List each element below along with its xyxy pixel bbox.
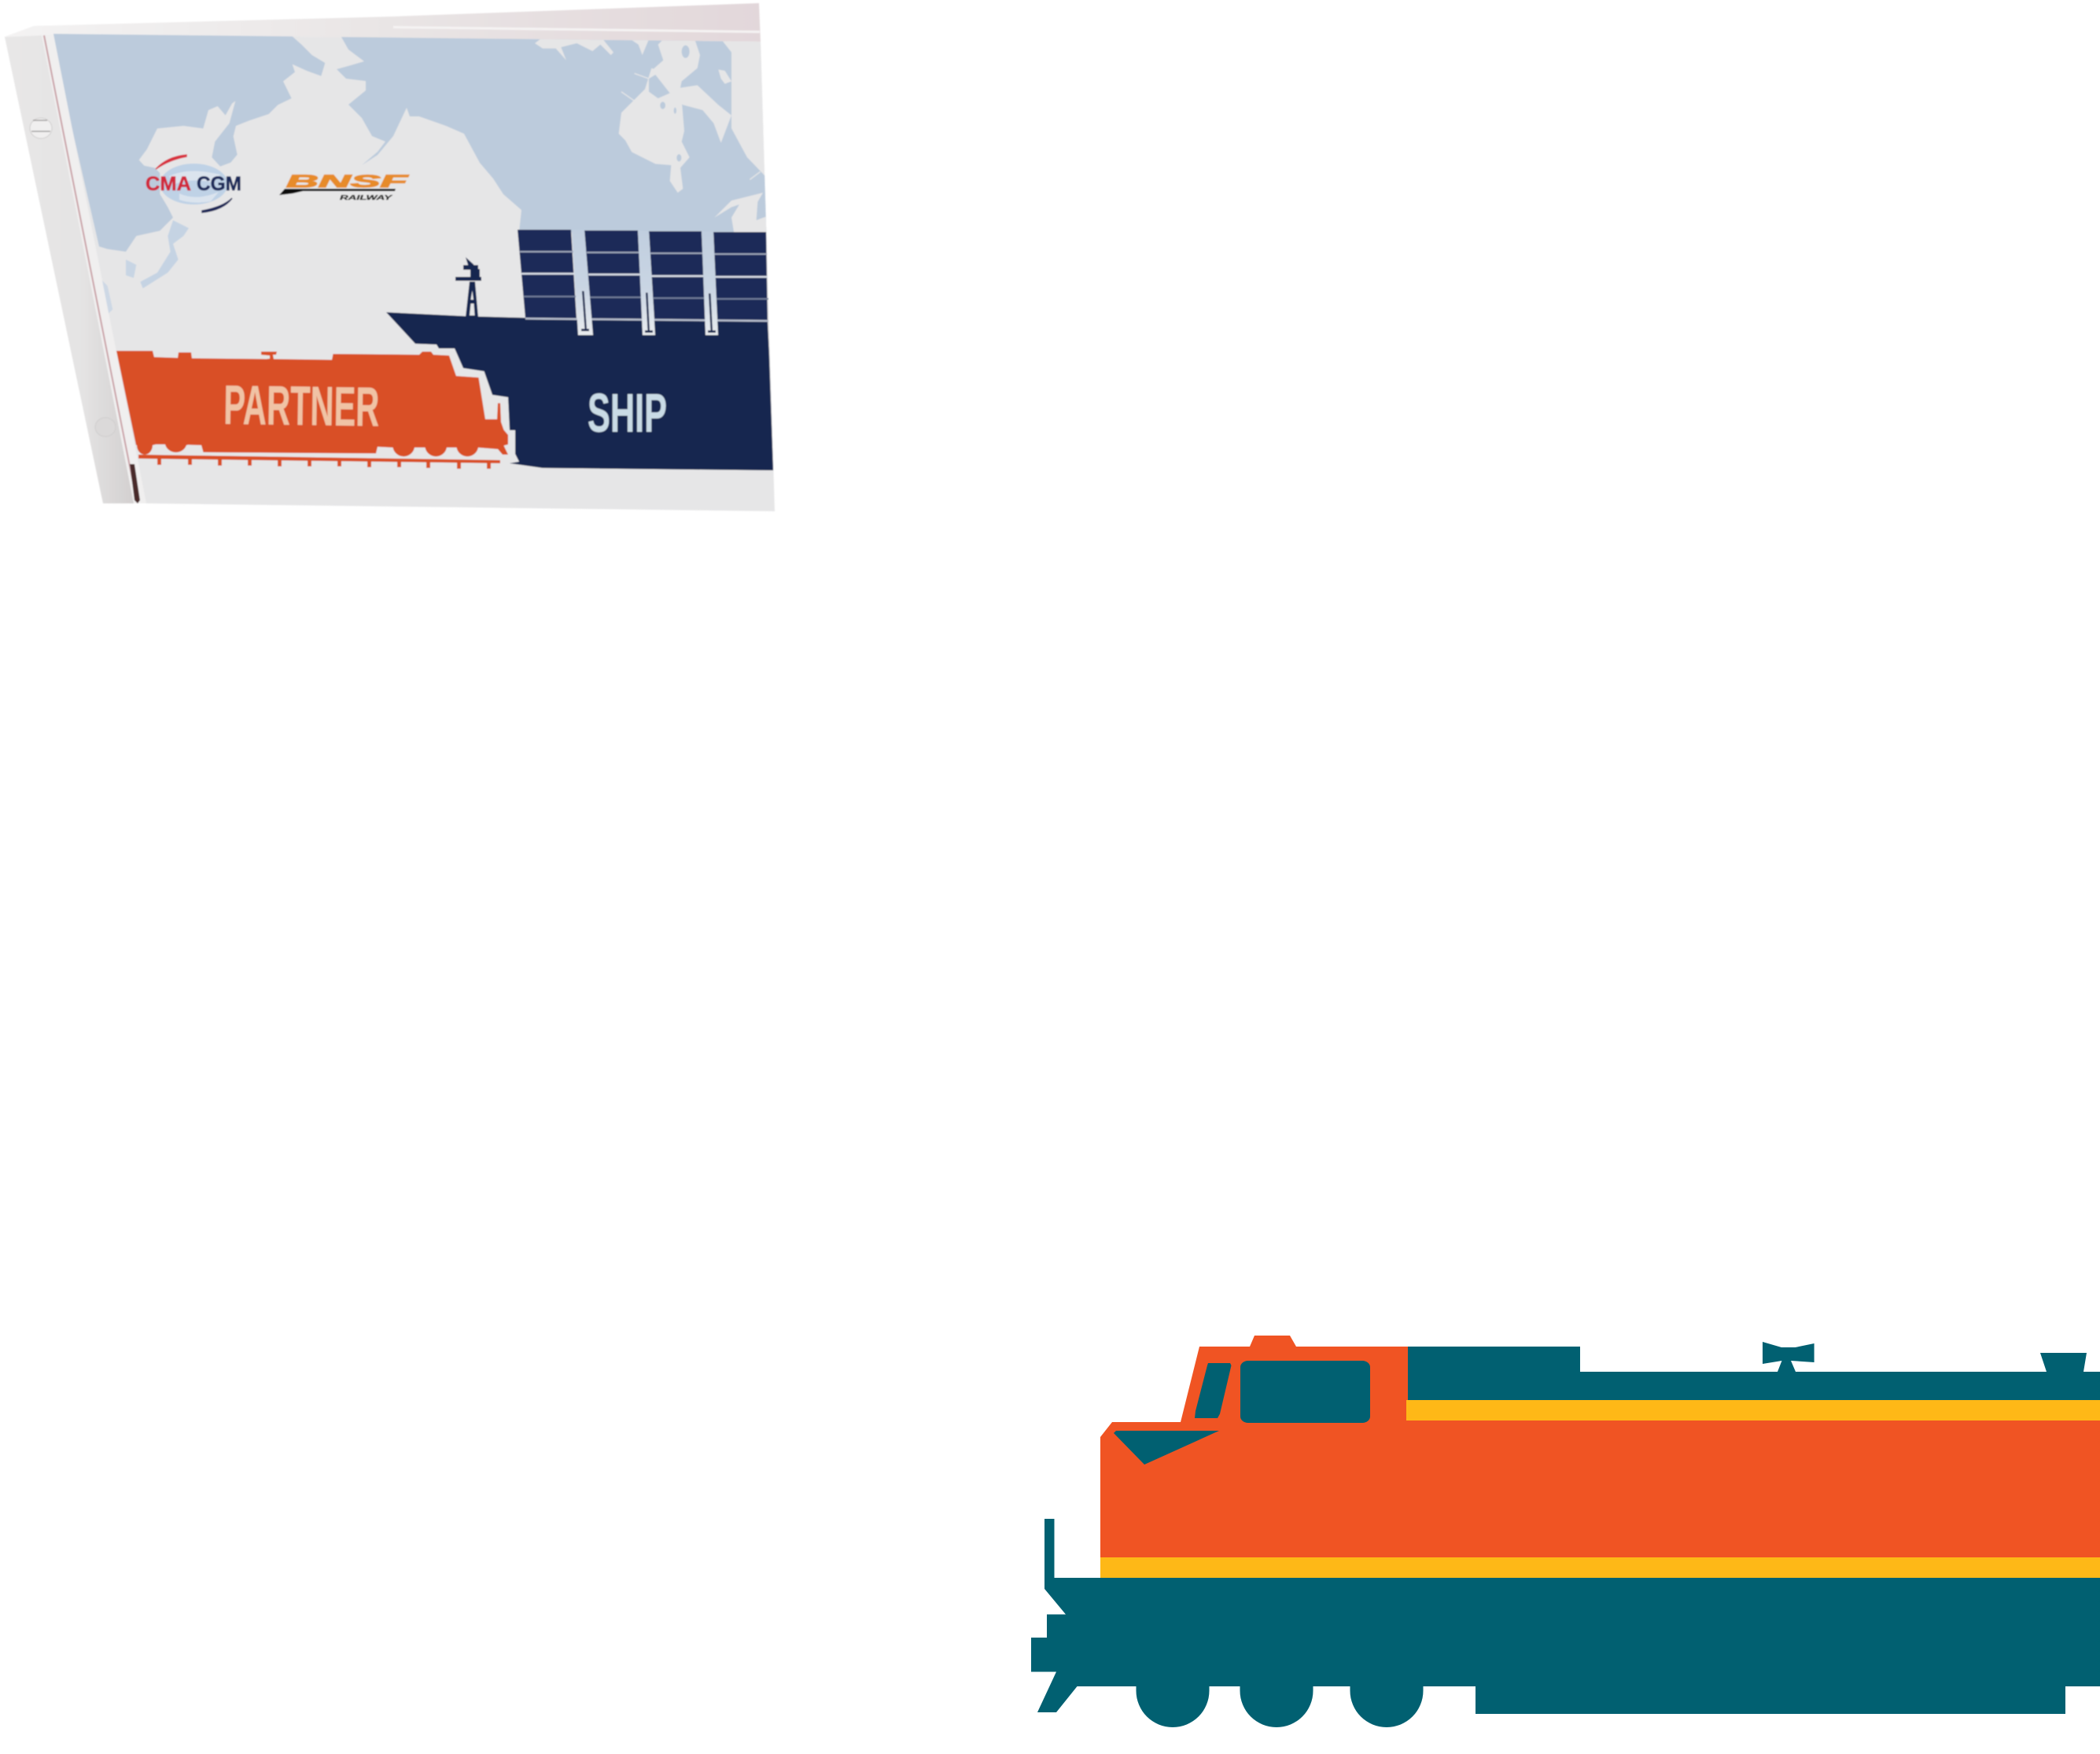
map: right page strip (731, 53, 742, 109)
spine white strip (42, 34, 147, 503)
land: newfoundland coast (714, 193, 767, 234)
logo: bnsf railway (279, 171, 408, 201)
logo red arc (156, 155, 186, 169)
ship container lines lower (524, 297, 768, 299)
map (50, 31, 768, 315)
land: northern island strip (632, 40, 648, 55)
locomotive (1031, 1336, 2100, 1727)
staple disc (30, 118, 52, 138)
ship container lines upper (520, 252, 767, 254)
logo cgm wordmark: CGM (197, 173, 241, 195)
logo navy arc (202, 198, 232, 212)
ship container stacks (518, 230, 768, 321)
locomotive wheel one (1136, 1683, 1210, 1727)
land: fine strait lines (621, 73, 761, 179)
page stack white line (393, 26, 760, 33)
locomotive windshield (1114, 1431, 1219, 1465)
map: sea of japan (140, 220, 189, 289)
ship label: SHIP (588, 382, 667, 444)
logo globe (160, 164, 228, 205)
land: baffin region (653, 39, 731, 143)
small train (116, 351, 508, 469)
locomotive main window (1240, 1361, 1370, 1423)
spine binding mark (130, 464, 140, 503)
bnsf swoosh (279, 189, 396, 195)
staple marks (31, 120, 50, 131)
locomotive orange cab and body (1100, 1336, 2100, 1561)
map: korea coast (126, 260, 136, 278)
logo cma wordmark: CMA (146, 173, 191, 195)
spine staple upper (30, 118, 52, 138)
locomotive upper teal body (1408, 1342, 2100, 1408)
cover page (53, 34, 775, 511)
logo globe land (169, 171, 220, 203)
small train rail (138, 455, 500, 463)
page stack top edge (4, 3, 761, 42)
ship container lines middle (521, 274, 768, 277)
land: northern lake (682, 46, 690, 58)
land: small lakes (660, 101, 681, 161)
land: canada mainland (619, 68, 690, 193)
locomotive wheel three (1350, 1683, 1424, 1727)
ship deck line (525, 319, 768, 321)
map: north america land (535, 39, 767, 234)
ship hull (386, 312, 773, 470)
locomotive chassis with plow and handrail (1031, 1519, 2100, 1714)
ship (386, 230, 773, 470)
map: eastern ocean (337, 31, 768, 234)
logo: cma cgm (146, 155, 241, 212)
spine (5, 35, 135, 503)
ship mast openings (470, 290, 475, 315)
small train ties (157, 458, 491, 469)
spine staple lower (95, 418, 116, 437)
land: arctic islands (535, 39, 613, 61)
locomotive lower yellow stripe (1100, 1557, 2100, 1578)
map: southwest coast (102, 282, 113, 313)
ship mast (455, 257, 481, 317)
ship pole slits (581, 291, 716, 333)
railway label: RAILWAY (340, 194, 392, 201)
spine pink line (44, 35, 137, 502)
small train body (116, 351, 508, 456)
land: hudson inlet (649, 75, 670, 98)
small train label: PARTNER (223, 374, 380, 439)
locomotive wheel two (1240, 1683, 1313, 1727)
locomotive side window (1195, 1363, 1232, 1418)
locomotive upper yellow stripe (1406, 1400, 2100, 1421)
map: western ocean (50, 31, 325, 252)
bnsf wordmark: BNSF (286, 171, 408, 191)
land: greenland inner strip (718, 69, 731, 84)
ship column gaps (572, 230, 718, 335)
brochure cover (4, 3, 775, 511)
